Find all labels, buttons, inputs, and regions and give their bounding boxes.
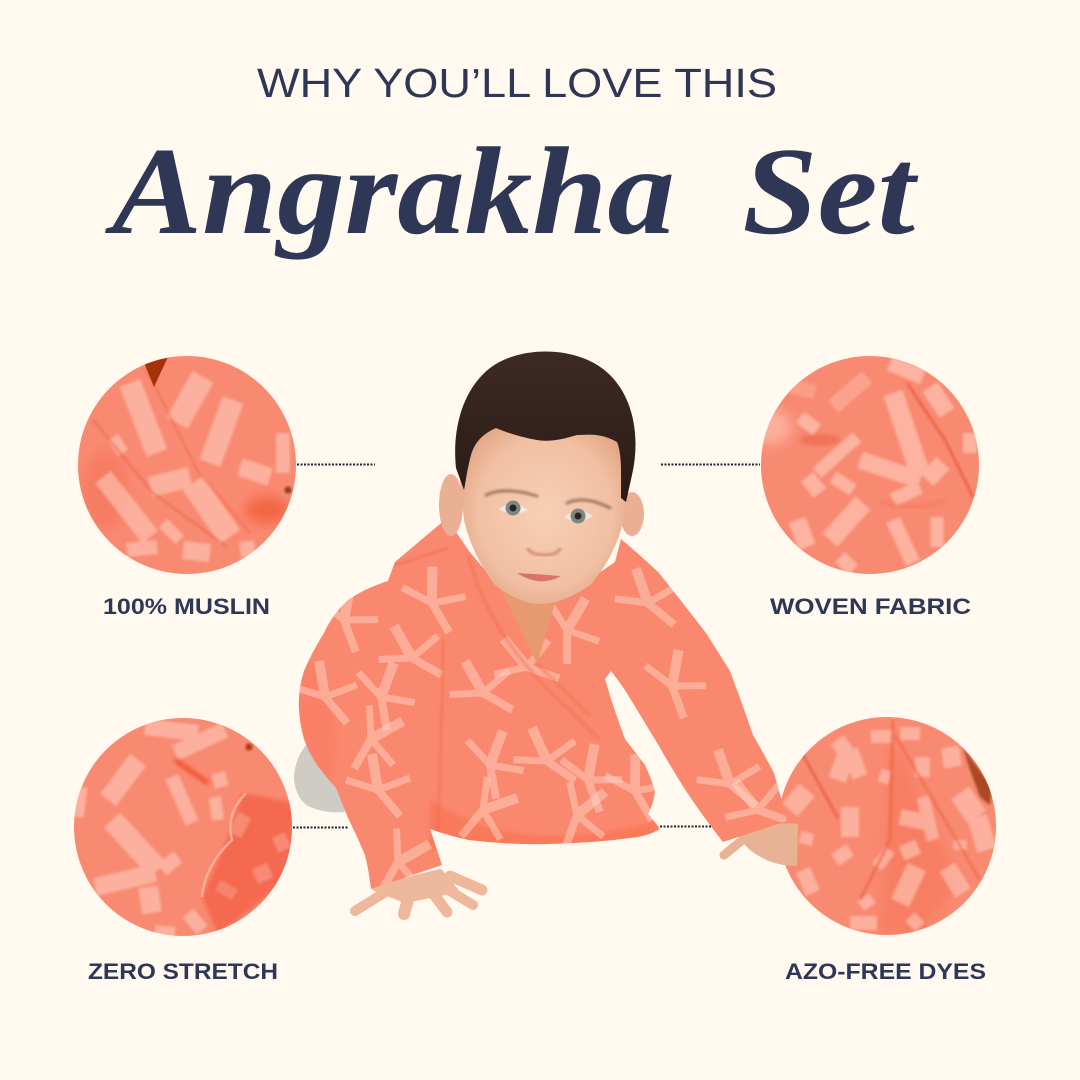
heading: why you'll love this: WHY YOU’LL LOVE THIS	[257, 60, 777, 106]
label: azo-free dyes: AZO-FREE DYES	[785, 959, 986, 984]
connector: zero stretch	[293, 826, 348, 828]
fabric swatch: woven fabric	[761, 356, 979, 574]
connector: woven	[661, 464, 760, 466]
garment	[299, 519, 787, 889]
garment print and folds	[293, 548, 799, 901]
eyebrows	[486, 491, 610, 508]
nose	[528, 549, 560, 555]
leg	[294, 745, 345, 812]
face	[460, 415, 630, 604]
right hand	[724, 823, 798, 866]
label: 100% muslin: 100% MUSLIN	[103, 594, 270, 619]
right eye	[564, 508, 593, 524]
illustration: crawling baby in angrakha	[293, 352, 799, 914]
connector: azo-free	[660, 826, 712, 828]
left ear	[439, 474, 463, 536]
fabric swatch: azo-free dyes	[778, 717, 996, 935]
hair	[455, 352, 636, 502]
right ear	[620, 492, 644, 536]
fabric swatch: zero stretch	[74, 718, 292, 936]
label: woven fabric: WOVEN FABRIC	[770, 594, 971, 619]
fabric swatch: 100% muslin	[78, 356, 296, 574]
label: zero stretch: ZERO STRETCH	[88, 959, 278, 984]
chest skin at neckline	[495, 585, 560, 668]
title: Angrakha Set: Angrakha Set	[104, 123, 919, 261]
connector: muslin	[297, 464, 375, 466]
left hand	[355, 872, 482, 914]
left eye	[499, 500, 528, 516]
mouth	[517, 573, 561, 581]
